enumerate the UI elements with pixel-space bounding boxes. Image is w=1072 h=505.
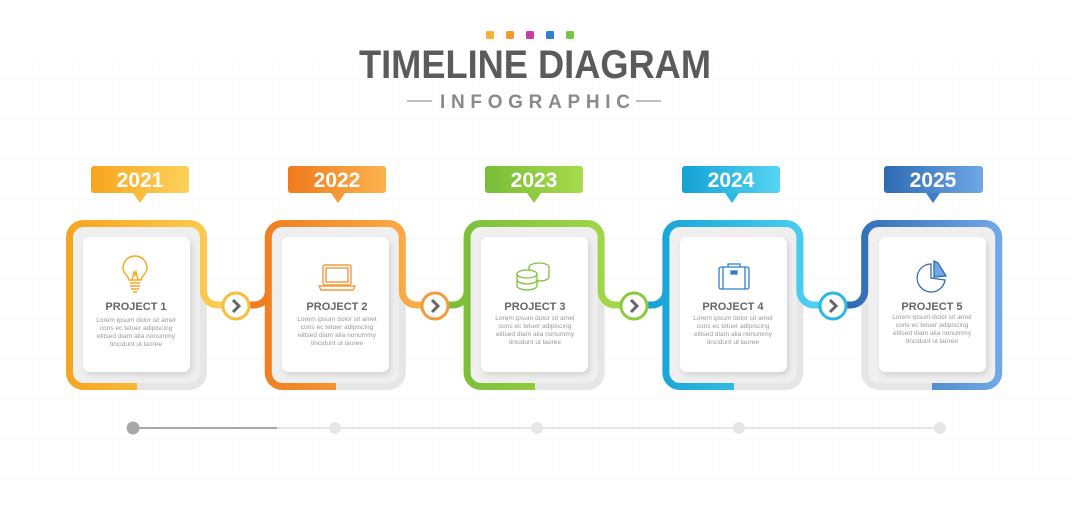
step 4: tincidunt ut laoree (707, 339, 759, 346)
step 5: cons ec tetuer adipiscing (896, 322, 969, 329)
progress bar (126, 422, 946, 434)
step 5 (846, 166, 999, 386)
step 4: elitsed diam alia nonummy (694, 331, 773, 338)
step 2: PROJECT 2 (306, 301, 368, 313)
icon: laptop (319, 265, 355, 290)
step 1: elitsed diam alia nonummy (97, 333, 176, 340)
step 1: tincidunt ut laoree (110, 341, 162, 348)
step 5: 2025 (910, 169, 957, 192)
step 2: cons ec tetuer adipiscing (301, 324, 374, 331)
step 2: Lorem ipsum dolor sit amet (297, 316, 377, 323)
step 2: tincidunt ut laoree (311, 340, 363, 347)
step 1: PROJECT 1 (105, 301, 167, 313)
step 3: elitsed diam alia nonummy (496, 331, 575, 338)
title block (359, 31, 711, 113)
step 4: cons ec tetuer adipiscing (697, 323, 770, 330)
step 3: PROJECT 3 (504, 301, 566, 313)
arrow circles (223, 293, 846, 319)
step 5: PROJECT 5 (901, 301, 963, 313)
step 2: elitsed diam alia nonummy (298, 332, 377, 339)
step 1: Lorem ipsum dolor sit amet (96, 317, 176, 324)
step 5: tincidunt ut laoree (906, 338, 958, 345)
step 3: cons ec tetuer adipiscing (499, 323, 572, 330)
icon: pie chart (917, 261, 946, 292)
color dots (486, 31, 574, 39)
step 4: 2024 (708, 169, 755, 192)
step 2: 2022 (314, 169, 360, 192)
step 3: 2023 (511, 169, 557, 192)
step 1: cons ec tetuer adipiscing (100, 325, 173, 332)
step 1 (70, 166, 236, 386)
title: TIMELINE DIAGRAM (359, 43, 711, 87)
step 3: Lorem ipsum dolor sit amet (495, 315, 575, 322)
year tag: 2021 (117, 169, 164, 192)
subtitle: INFOGRAPHIC (440, 92, 630, 113)
step 3: tincidunt ut laoree (509, 339, 561, 346)
step 4 (647, 166, 833, 386)
step 2 (249, 166, 435, 386)
icon: briefcase (719, 264, 749, 289)
step 4: PROJECT 4 (702, 301, 764, 313)
step 4: Lorem ipsum dolor sit amet (693, 315, 773, 322)
icon: coins (517, 263, 549, 290)
step 5: Lorem ipsum dolor sit amet (892, 314, 972, 321)
step 3 (448, 166, 634, 386)
icon: light bulb (123, 256, 147, 292)
card (83, 237, 190, 372)
step 5: elitsed diam alia nonummy (893, 330, 972, 337)
year tag (91, 166, 189, 203)
